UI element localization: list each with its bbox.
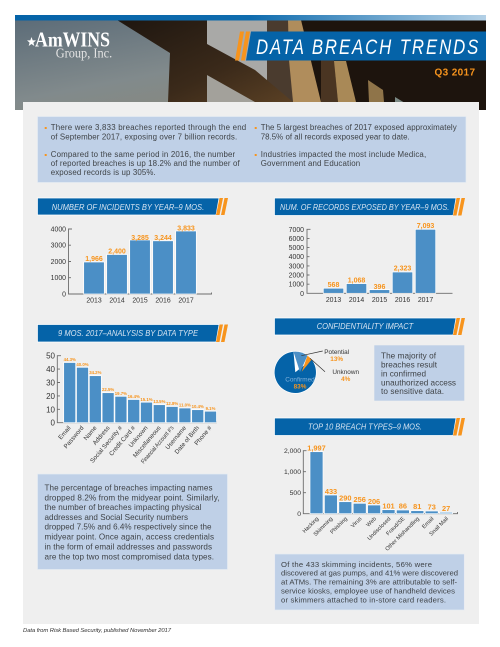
text block: skimming incidents: service kiosks, employee use of handheld devices	[281, 586, 455, 595]
bar chart: breach types: Fraud/SE	[385, 516, 407, 537]
text block: data type commentary: in the form of email addresses and passwords	[44, 542, 212, 551]
bar chart: breach types: 86	[399, 502, 407, 510]
bar chart: incidents: 4000	[51, 226, 66, 234]
bar chart: data types: 40.0%	[76, 362, 89, 367]
bar chart: breach types: Virus	[350, 516, 364, 529]
bar chart: incidents: 2000	[51, 259, 66, 266]
bar chart: breach types: 1,997	[307, 444, 326, 452]
bar chart: incidents: 2013	[86, 298, 102, 304]
bar chart: records: 2,323	[394, 266, 411, 272]
bar chart: data types: 10.4%	[192, 404, 204, 409]
logo: AmWINS Group, Inc.: Group, Inc.	[56, 47, 112, 62]
heading: number of incidents	[38, 198, 228, 215]
bar chart: breach types: Web	[366, 516, 378, 528]
bar chart: data types: 22.5%	[102, 387, 114, 392]
bar chart: breach types: Email	[421, 516, 435, 530]
main panel	[23, 102, 479, 624]
text block: data type commentary	[38, 474, 228, 570]
bullet: largest breaches: 78.5% of all records exposed year to date.	[261, 132, 410, 142]
text block: majority of breaches: The majority of	[381, 352, 437, 360]
bar chart: data types: 12.8%	[166, 401, 178, 406]
bar chart: breach types: Other Mishandling	[385, 516, 421, 553]
bar chart: breach types: Skimming	[313, 516, 334, 538]
bar chart: data types: 16.4%	[128, 394, 140, 399]
bar chart: records: 396	[374, 284, 385, 291]
bar chart: breach types	[284, 444, 458, 553]
bar chart: records: 2013	[326, 297, 341, 304]
bar chart: incidents: 3,833	[177, 226, 195, 232]
bar chart: records: 0	[300, 291, 304, 298]
subtitle: quarter: Q3 2017	[434, 68, 475, 78]
bar chart: incidents	[51, 226, 212, 304]
bullet: industries: Government and Education	[261, 159, 360, 168]
header banner	[15, 15, 486, 110]
bar chart: breach types: Hacking	[302, 516, 320, 535]
text block: skimming incidents	[275, 554, 464, 610]
bar chart: data types	[46, 352, 216, 465]
bullet: industries	[255, 150, 426, 168]
key findings box	[38, 116, 466, 182]
bar chart: records: 2016	[395, 297, 410, 304]
bullet: breaches reported	[45, 123, 246, 142]
bar chart: breach types: 2,000	[284, 448, 301, 455]
bar chart: incidents: 1,966	[85, 256, 103, 263]
bar chart: data types: Email	[57, 425, 73, 441]
text block: data type commentary: addresses and Social Security numbers	[44, 513, 188, 522]
header photo background	[15, 20, 486, 110]
heading: top 10 breach types	[274, 418, 465, 436]
bar chart: breach types: 206	[368, 497, 380, 506]
bar chart: data types: Credit Card #	[108, 424, 137, 457]
bar chart: records: 7000	[289, 227, 304, 234]
bar chart: data types: Financial Account #'s	[140, 425, 176, 465]
text block: data type commentary: dropped 8.2% from the midyear point. Similarly,	[44, 493, 220, 502]
bar chart: data types: Miscellaneous	[132, 425, 163, 459]
pie chart: confidentiality: 13%	[330, 356, 343, 363]
bar chart: data types: 15.1%	[140, 397, 153, 402]
bar chart: data types: 13.5%	[153, 399, 166, 404]
heading: top 10 breach types: TOP 10 BREACH TYPES–9 MOS.	[308, 422, 422, 432]
bar chart: breach types: 500	[290, 490, 301, 497]
bar chart: data types: Social Security #	[89, 424, 124, 465]
bar chart: incidents: 2014	[109, 298, 125, 304]
bar chart: records: 568	[328, 282, 339, 289]
top gradient strip	[15, 15, 486, 20]
bullet: breaches reported: of September 2017, exposing over 7 billion records.	[51, 132, 237, 142]
bar chart: breach types: 73	[428, 502, 436, 511]
pie chart: confidentiality: 4%	[341, 376, 351, 383]
bar chart: data types: Address	[92, 425, 112, 447]
bar chart: records	[289, 223, 452, 304]
bar chart: breach types: 1,000	[284, 469, 301, 476]
bar chart: breach types: 290	[339, 493, 351, 502]
bar chart: records: 5000	[289, 245, 304, 252]
bullet: compared to 2016: Compared to the same period in 2016, the number	[51, 150, 236, 159]
bar chart: records: 2015	[372, 297, 387, 304]
logo: AmWINS Group, Inc.: AmWINS	[35, 28, 110, 52]
text block: skimming incidents: at ATMs. The remaining 3% are attributable to self-	[281, 577, 457, 586]
bar chart: breach types: Phishing	[329, 516, 349, 536]
pie chart: confidentiality: 83%	[294, 384, 307, 390]
bar chart: breach types: 101	[382, 501, 395, 510]
bar chart: data types: 9.1%	[206, 406, 216, 411]
heading: records exposed	[274, 198, 465, 216]
pie chart: confidentiality: Potential	[324, 349, 349, 356]
bar chart: data types: 50	[46, 352, 56, 361]
bar chart: incidents: 3,244	[154, 235, 172, 242]
footnote: source: Data from Risk Based Security, published November 2017	[23, 628, 172, 634]
heading: confidentiality impact: CONFIDENTIALITY IMPACT	[317, 321, 414, 331]
panel: number of incidents	[38, 198, 228, 304]
pie chart: confidentiality: Confirmed	[285, 376, 315, 384]
heading: analysis by data type: 9 MOS. 2017–ANALYSIS BY DATA TYPE	[58, 328, 198, 338]
bar chart: breach types: 256	[354, 495, 366, 504]
bar chart: records: 1,068	[348, 278, 365, 284]
bar chart: records: 2014	[349, 297, 364, 304]
bar chart: data types: 19.7%	[115, 391, 127, 396]
bar chart: data types: Date of Birth	[174, 424, 201, 456]
text block: majority of breaches	[374, 345, 464, 401]
bar chart: data types: 20	[46, 392, 56, 401]
bar chart: data types: Phone #	[193, 424, 214, 447]
text block: majority of breaches: breaches result	[381, 360, 438, 370]
logo: AmWINS Group, Inc.	[27, 28, 112, 62]
bar chart: data types: 40	[46, 365, 56, 374]
bullet: industries: Industries impacted the most include Medica,	[261, 150, 426, 159]
bullet: largest breaches: The 5 largest breaches of 2017 exposed approximately	[261, 123, 457, 132]
bar chart: breach types: Snail Mail	[429, 516, 450, 538]
bar chart: incidents: 2017	[178, 298, 194, 304]
text block: majority of breaches: in confirmed	[381, 370, 426, 378]
panel: records exposed	[274, 198, 465, 304]
bar chart: records: 7,093	[417, 223, 434, 230]
bar chart: data types: Username	[164, 424, 188, 451]
pie chart: confidentiality: Unknown	[332, 369, 359, 376]
text block: majority of breaches: unauthorized access	[381, 378, 456, 388]
text block: data type commentary: dropped 7.5% and 6.4% respectively since the	[44, 523, 212, 532]
bar chart: incidents: 1000	[51, 275, 66, 282]
bullet: breaches reported: There were 3,833 breaches reported through the end	[51, 123, 246, 132]
bar chart: data types: Password	[63, 424, 86, 450]
text block: skimming incidents: discovered at gas pumps, and 41% were discovered	[281, 569, 458, 578]
text block: data type commentary: the number of breaches impacting physical	[44, 503, 202, 512]
heading: analysis by data type	[38, 324, 228, 342]
icon: logo star	[27, 37, 36, 46]
bar chart: records: 3000	[289, 263, 304, 270]
bullet: compared to 2016	[45, 150, 240, 177]
bullet: largest breaches	[255, 123, 457, 142]
bar chart: incidents: 3000	[51, 242, 66, 250]
text block: data type commentary: midyear point. Once again, access credentials	[44, 532, 214, 541]
bar chart: data types: Name	[83, 424, 99, 442]
panel: confidentiality impact	[274, 318, 465, 401]
bar chart: records: 4000	[289, 254, 304, 261]
text block: skimming incidents: Of the 433 skimming incidents, 56% were	[281, 560, 432, 569]
title band	[235, 32, 486, 60]
panel: top 10 breach types	[274, 418, 465, 553]
panel: analysis by data type	[38, 324, 228, 465]
bullet: compared to 2016: of reported breaches is up 18.2% and the number of	[51, 159, 240, 168]
bar chart: breach types: 27	[442, 504, 450, 513]
bar chart: breach types: 433	[325, 487, 337, 496]
text block: data type commentary: The percentage of breaches impacting names	[44, 484, 212, 493]
bar chart: data types: 10	[46, 405, 56, 414]
text block: majority of breaches: to sensitive data.	[381, 387, 444, 396]
bar chart: incidents: 0	[62, 292, 66, 298]
bar chart: data types: 44.3%	[64, 357, 76, 362]
heading: number of incidents: NUMBER OF INCIDENTS BY YEAR–9 MOS.	[52, 202, 204, 212]
text block: skimming incidents: or skimmers attached to in-store card readers.	[281, 595, 446, 604]
bar chart: incidents: 3,285	[131, 235, 149, 242]
bar chart: data types: 11.0%	[179, 402, 191, 407]
bar chart: breach types: 81	[413, 502, 421, 511]
heading: records exposed: NUM. OF RECORDS EXPOSED BY YEAR–9 MOS.	[280, 202, 449, 212]
bar chart: breach types: Undisclosed	[367, 516, 392, 542]
bullet: compared to 2016: exposed records is up 305%.	[51, 168, 156, 177]
title: DATA BREACH TRENDS	[256, 36, 478, 60]
bar chart: incidents: 2,400	[108, 248, 126, 256]
bar chart: data types: 34.2%	[89, 370, 102, 375]
bar chart: records: 1000	[289, 282, 304, 289]
bar chart: records: 6000	[289, 236, 304, 243]
heading: confidentiality impact	[274, 318, 465, 335]
bar chart: incidents: 2015	[132, 298, 148, 304]
bar chart: records: 2000	[289, 272, 304, 280]
bar chart: data types: 0	[51, 419, 56, 428]
bar chart: breach types: 0	[297, 511, 301, 518]
text block: data type commentary: are the top two most compromised data types.	[44, 552, 214, 561]
bar chart: data types: 30	[46, 378, 56, 388]
bar chart: records: 2017	[418, 297, 433, 304]
pie chart: confidentiality	[274, 349, 359, 394]
bar chart: incidents: 2016	[155, 298, 171, 304]
bar chart: data types: Unknown	[128, 424, 150, 449]
